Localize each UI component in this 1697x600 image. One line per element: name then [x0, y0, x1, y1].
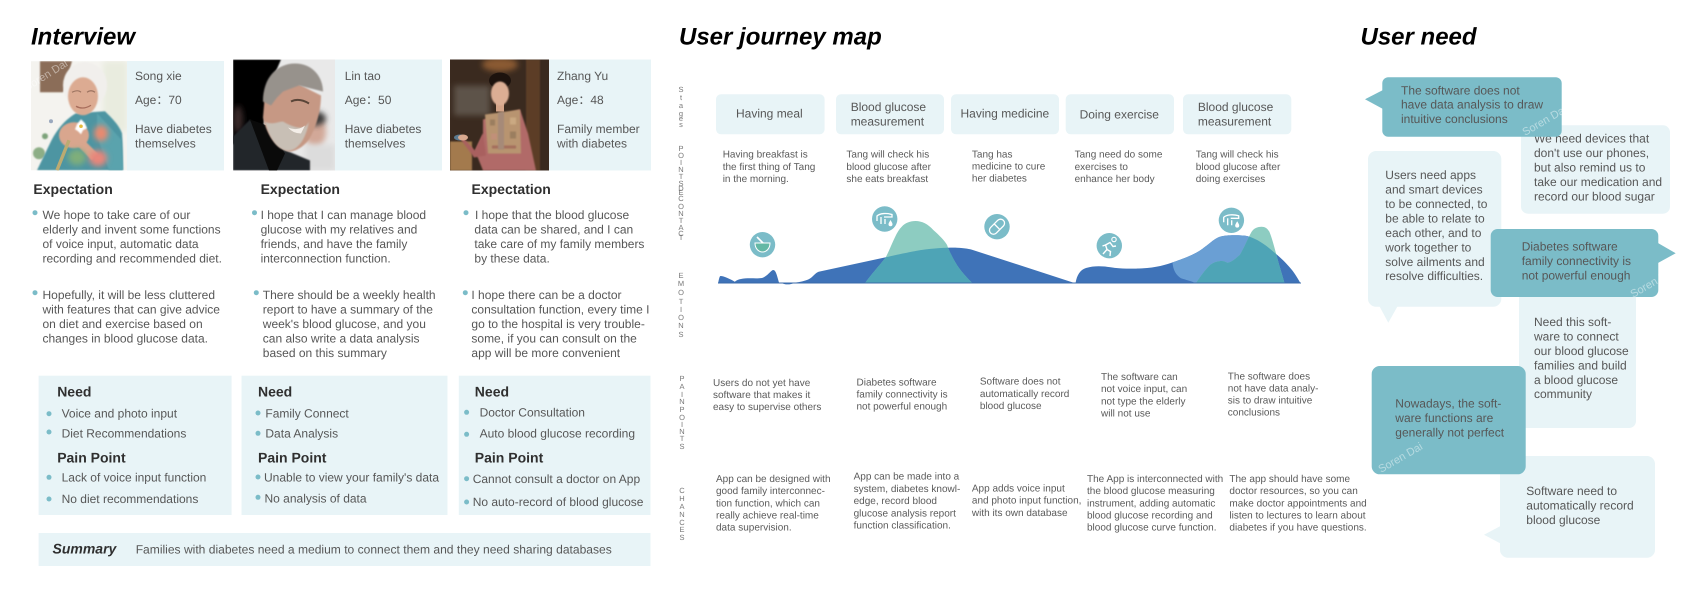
icon: glucose meter again	[1219, 208, 1244, 233]
row label: points of contact: S	[678, 179, 684, 188]
speech bubble: data analysis: intuitive conclusions	[1401, 112, 1508, 126]
speech bubble: devices: record our blood sugar	[1534, 189, 1655, 203]
row label: points of contact: N	[678, 165, 684, 174]
chances text row: App adds voice input	[972, 484, 1065, 495]
expectation column 1: of voice input, automatic data	[42, 237, 199, 251]
speech bubble: automatic recording: blood glucose	[1526, 513, 1601, 527]
speech bubble: apps and smart devices: solve ailments and	[1385, 255, 1485, 269]
pain points text row: Diabetes software	[856, 377, 937, 388]
chances text row: data supervision.	[716, 523, 792, 534]
row label: stages	[678, 85, 684, 129]
row label: stages: S	[678, 85, 684, 94]
speech bubble: functions not perfect: ware functions are	[1394, 411, 1494, 425]
row label: stages: t	[680, 93, 683, 102]
section: interview	[22, 23, 651, 566]
person details	[135, 69, 212, 150]
row label: pain points: P	[679, 374, 685, 383]
expectation column 3: by these data.	[474, 252, 550, 266]
section: user need	[1360, 23, 1677, 558]
chances text row: The app should have some	[1229, 474, 1350, 485]
chances text row: good family interconnec-	[716, 486, 825, 497]
chances text row: App can be made into a	[854, 472, 960, 483]
row label: emotions: O	[678, 313, 684, 322]
person details: Lin tao	[345, 69, 381, 83]
speech bubble: blood glucose community	[1519, 285, 1636, 428]
row label: stages: a	[679, 101, 684, 110]
row label: pain points	[679, 374, 685, 451]
person details: themselves	[345, 136, 405, 150]
photo: elderly woman with a flower	[22, 58, 127, 170]
row label: points of contact: P	[678, 144, 684, 153]
expectation column 1	[32, 181, 222, 346]
expectation column 3: I hope that the blood glucose	[475, 208, 629, 222]
panel: need and pain point 2	[242, 376, 448, 515]
pain points text row: not type the elderly	[1101, 396, 1186, 407]
row label: points of contact: E	[678, 188, 684, 197]
speech bubble: devices	[1521, 125, 1670, 214]
contact point text row: blood glucose after	[846, 162, 932, 173]
heading: User need: User need	[1360, 23, 1478, 50]
expectation column 1: Hopefully, it will be less cluttered	[42, 288, 215, 302]
panel: need and pain point 3: Cannot consult a doctor on App	[473, 472, 640, 486]
chances text row: make doctor appointments and	[1229, 498, 1367, 509]
speech bubble: data analysis	[1365, 77, 1569, 139]
expectation column 2: based on this summary	[263, 346, 387, 360]
icon: pill	[984, 214, 1010, 239]
contact point text row: she eats breakfast	[846, 174, 928, 185]
speech bubble: apps and smart devices: each other, and to	[1385, 226, 1482, 240]
person details: with diabetes	[556, 136, 627, 150]
speech bubble: apps and smart devices: resolve difficulties.	[1385, 269, 1483, 283]
row label: pain points: I	[681, 420, 683, 429]
speech bubble: blood glucose community: ware to connect	[1533, 330, 1619, 344]
speech bubble: devices: don't use our phones,	[1534, 146, 1649, 160]
row label: emotions	[678, 271, 684, 339]
chances text row: instrument, adding automatic	[1087, 498, 1215, 509]
row label: emotions: N	[678, 321, 684, 330]
expectation column 2: interconnection function.	[261, 252, 391, 266]
expectation column 3: app will be more convenient	[471, 346, 621, 360]
speech bubble: apps and smart devices	[1368, 151, 1501, 323]
photo: elderly woman with a flower: Soren Dai	[22, 58, 70, 94]
row label: points of contact: D	[678, 184, 684, 193]
expectation column 3	[463, 181, 649, 360]
chances text row: diabetes if you have questions.	[1229, 523, 1367, 534]
pain points text row: will not use	[1100, 408, 1151, 420]
photo: woman in a pink dress	[450, 60, 549, 170]
panel: need and pain point 1: Pain Point	[57, 449, 126, 465]
panel: need and pain point 1: Voice and photo input	[62, 406, 178, 420]
chances text row: App can be designed with	[716, 474, 831, 485]
contact point text row: her diabetes	[972, 174, 1027, 185]
row label: points of contact	[678, 144, 684, 242]
pain points text row: The software can	[1101, 372, 1178, 383]
person details: Age：50	[345, 93, 392, 107]
chances text row: The App is interconnected with	[1087, 474, 1223, 485]
row label: chances: E	[679, 525, 685, 534]
pain points text row: software that makes it	[713, 390, 810, 401]
row label: chances: C	[679, 486, 685, 495]
chances text row: edge, record blood	[854, 496, 937, 507]
speech bubble: family connectivity	[1491, 229, 1677, 301]
speech bubble: apps and smart devices: Users need apps	[1385, 168, 1476, 182]
row label: points of contact: C	[678, 229, 684, 238]
speech bubble: blood glucose community: families and build	[1534, 358, 1627, 372]
pain points text row: blood glucose	[980, 401, 1042, 412]
pain points text row: The software does	[1228, 371, 1310, 382]
expectation column 3: Expectation	[472, 181, 551, 197]
chances text row: function classification.	[854, 521, 951, 532]
speech bubble: blood glucose community: community	[1534, 387, 1592, 401]
chances text row: doctor resources, so you can	[1229, 486, 1358, 497]
pain points text row: easy to supervise others	[713, 402, 821, 413]
heading: Interview: Interview	[31, 23, 136, 50]
speech bubble: data analysis: The software does not	[1401, 83, 1520, 97]
contact point text row: Tang has	[972, 149, 1012, 160]
panel: need and pain point 1: Lack of voice input function	[62, 471, 206, 485]
expectation column 2: I hope that I can manage blood	[261, 208, 426, 222]
profile card: Lin tao	[233, 60, 442, 170]
row label: points of contact: T	[679, 216, 684, 225]
contact point text row: the first thing of Tang	[723, 162, 815, 173]
chances text row: really achieve real-time	[716, 510, 819, 522]
panel: need and pain point 2: No analysis of data	[264, 491, 367, 505]
speech bubble: apps and smart devices: be able to relate to	[1385, 211, 1485, 225]
contact point text row: blood glucose after	[1196, 162, 1281, 173]
chances text row: listen to lectures to learn about	[1229, 510, 1366, 522]
stage: blood glucose measurement: Blood glucose	[851, 100, 926, 114]
chances text row: glucose analysis report	[854, 508, 956, 519]
row label: chances: S	[679, 533, 685, 542]
expectation column 2: glucose with my relatives and	[261, 222, 417, 236]
panel: summary: Summary	[52, 540, 118, 556]
expectation column 3: go to the hospital is very trouble-	[471, 317, 645, 331]
person details: Have diabetes	[345, 122, 421, 136]
row label: stages: e	[679, 114, 683, 123]
pain points text row: Users do not yet have	[713, 378, 811, 389]
contact point text row: Having breakfast is	[723, 150, 808, 161]
row label: emotions: M	[678, 279, 684, 288]
panel: need and pain point 3	[459, 376, 650, 515]
pain points text row: Software does not	[980, 377, 1061, 388]
chances text row	[716, 472, 1367, 534]
expectation column 1: We hope to take care of our	[42, 208, 190, 222]
row label: stages: s	[679, 120, 683, 129]
speech bubble: functions not perfect	[1372, 366, 1526, 476]
contact point text row: enhance her body	[1075, 174, 1155, 185]
speech bubble: automatic recording: automatically record	[1526, 498, 1634, 512]
row label: pain points: O	[679, 413, 685, 422]
speech bubble: data analysis: Soren Dai	[1520, 104, 1569, 139]
speech bubble: blood glucose community: Need this soft-	[1534, 315, 1611, 329]
panel: need and pain point 3: Auto blood glucose recording	[480, 426, 635, 440]
contact point text row: Tang need do some	[1075, 150, 1163, 161]
expectation column 2: week's blood glucose, and you	[262, 317, 426, 331]
expectation column 2: There should be a weekly health	[263, 288, 436, 302]
speech bubble: automatic recording	[1484, 456, 1655, 558]
stage: having medicine	[951, 94, 1059, 134]
pain points text row: not voice input, can	[1101, 384, 1187, 395]
row label: pain points: T	[680, 434, 685, 443]
row label: emotions: S	[678, 330, 684, 339]
row label: emotions: E	[678, 271, 684, 280]
panel: need and pain point 3: Pain Point	[475, 449, 544, 465]
row label: chances: C	[679, 518, 685, 527]
pain points text row: not powerful enough	[856, 402, 947, 412]
chances text row: blood glucose curve function.	[1087, 523, 1217, 534]
stage: blood glucose measurement again	[1183, 94, 1291, 134]
speech bubble: blood glucose community: our blood glucose	[1534, 344, 1629, 358]
expectation column 2	[252, 181, 436, 360]
row label: points of contact: O	[678, 151, 684, 160]
expectation column 3: consultation function, every time I	[471, 302, 649, 316]
stage: doing exercise: Doing exercise	[1080, 107, 1159, 121]
pain points text row: conclusions	[1228, 408, 1280, 419]
expectation column 2: Expectation	[261, 181, 340, 197]
stage: having meal	[716, 94, 825, 134]
expectation column 2: report to have a summary of the	[263, 302, 433, 316]
profile card: Zhang Yu	[450, 58, 651, 170]
expectation column 1: recording and recommended diet.	[42, 252, 222, 266]
expectation column 3: I hope there can be a doctor	[471, 288, 622, 302]
stage: having meal: Having meal	[736, 107, 803, 121]
row label: emotions: O	[678, 288, 684, 297]
pain points text row: family connectivity is	[856, 389, 948, 400]
expectation column 1: with features that can give advice	[42, 302, 220, 316]
person details: Have diabetes	[135, 122, 212, 136]
expectation column 3: take care of my family members	[474, 237, 644, 251]
row label: chances	[679, 486, 685, 542]
icon: runner	[1097, 233, 1122, 258]
contact point text row: doing exercises	[1196, 174, 1265, 185]
chances text row: system, diabetes knowl-	[854, 484, 960, 495]
chances text row: blood glucose recording and	[1087, 510, 1213, 522]
speech bubble: apps and smart devices: to be connected, to	[1385, 197, 1488, 211]
speech bubble: devices: but also remind us to	[1534, 160, 1646, 174]
speech bubble: devices: We need devices that	[1534, 131, 1650, 145]
panel: need and pain point 2: Unable to view your family's data	[264, 471, 439, 485]
speech bubble: family connectivity: Diabetes software	[1522, 240, 1618, 254]
contact point text row: in the morning.	[723, 174, 789, 185]
expectation column 1: on diet and exercise based on	[42, 317, 203, 331]
pain points text row	[713, 371, 1318, 420]
row label: chances: N	[679, 510, 685, 519]
panel: need and pain point 3: No auto-record of blood glucose	[473, 495, 644, 509]
row label: points of contact: T	[679, 172, 684, 181]
stage: doing exercise	[1066, 94, 1174, 134]
panel: need and pain point 2: Family Connect	[265, 406, 349, 420]
photo: smiling man with grey hair	[233, 60, 335, 170]
chances text row: the blood glucose measuring	[1087, 486, 1215, 497]
speech bubble: devices: take our medication and	[1534, 175, 1662, 189]
pain points text row: not have data analy-	[1228, 383, 1318, 394]
contact point text row: medicine to cure	[972, 161, 1046, 172]
panel: need and pain point 3: Need	[475, 384, 509, 400]
person details	[556, 69, 640, 150]
row label: pain points: N	[679, 397, 685, 406]
row label: pain points: P	[679, 405, 685, 414]
section: user journey map	[678, 23, 1367, 542]
chances text row: with its own database	[971, 508, 1068, 519]
icon: glucose meter	[872, 206, 897, 232]
expectation column 1: Expectation	[33, 181, 113, 197]
expectation column 2: friends, and have the family	[261, 237, 407, 251]
panel: need and pain point 2: Data Analysis	[265, 426, 338, 440]
expectation column 3: data can be shared, and I can	[474, 222, 633, 236]
person details: themselves	[135, 136, 196, 150]
chances text row: tion function, which can	[716, 498, 820, 509]
speech bubble: functions not perfect: Nowadays, the soft-	[1395, 397, 1501, 411]
panel: need and pain point 2: Pain Point	[258, 449, 327, 465]
pain points text row: sis to draw intuitive	[1228, 396, 1313, 406]
expectation column 3: some, if you can consult on the	[471, 332, 637, 346]
speech bubble: functions not perfect: Soren Dai	[1376, 441, 1425, 476]
row label: points of contact: N	[678, 209, 684, 218]
panel: need and pain point 2: Need	[258, 384, 292, 400]
panel: need and pain point 3: Doctor Consultation	[480, 405, 585, 419]
row label: pain points: I	[681, 390, 683, 399]
panel: need and pain point 1: No diet recommendations	[62, 492, 198, 506]
row label: pain points: N	[679, 427, 685, 436]
expectation column 2: can also write a data analysis	[263, 332, 420, 346]
speech bubble: apps and smart devices: and smart devices	[1385, 182, 1483, 196]
icon: bowl	[750, 232, 775, 257]
contact point text row: exercises to	[1075, 162, 1128, 173]
stage: blood glucose measurement again: measurement	[1198, 114, 1272, 128]
speech bubble: data analysis: have data analysis to draw	[1401, 98, 1543, 112]
stage: blood glucose measurement: measurement	[851, 114, 925, 128]
row label: points of contact: A	[678, 223, 684, 232]
person details: Zhang Yu	[557, 69, 608, 83]
row label: pain points: S	[679, 442, 685, 451]
row label: points of contact: O	[678, 202, 684, 211]
person details	[345, 69, 421, 150]
person details: Family member	[557, 122, 640, 136]
row label: chances: H	[679, 494, 685, 503]
speech bubble: apps and smart devices: work together to	[1384, 240, 1472, 254]
expectation column 1: changes in blood glucose data.	[42, 332, 208, 346]
speech bubble: family connectivity: Soren Dai	[1628, 266, 1677, 301]
panel: summary: Families with diabetes need a medium to connect them and they need sharing databases	[136, 543, 612, 557]
expectation column 1: elderly and invent some functions	[42, 222, 221, 236]
contact point text row: Tang will check his	[1196, 150, 1279, 161]
speech bubble: blood glucose community: a blood glucose	[1534, 373, 1618, 387]
panel: need and pain point 1: Need	[57, 384, 91, 400]
row label: pain points: A	[679, 382, 685, 391]
stage: having medicine: Having medicine	[960, 107, 1050, 121]
pain points text row: automatically record	[980, 389, 1069, 400]
row label: points of contact: T	[679, 233, 684, 242]
row label: emotions: T	[679, 297, 684, 306]
person details: Song xie	[135, 69, 182, 83]
row label: stages: g	[679, 109, 683, 118]
stage: blood glucose measurement	[836, 94, 944, 134]
speech bubble: automatic recording: Software need to	[1526, 484, 1617, 498]
speech bubble: family connectivity: not powerful enough	[1522, 268, 1630, 282]
person details: Age：48	[557, 93, 604, 107]
row label: points of contact: I	[680, 158, 682, 167]
contact point text row: Tang will check his	[846, 150, 929, 161]
row label: chances: A	[679, 502, 685, 511]
speech bubble: family connectivity: family connectivity is	[1522, 254, 1631, 268]
panel: need and pain point 1: Diet Recommendations	[62, 426, 186, 440]
chances text row: and photo input function,	[972, 496, 1081, 507]
emotion area chart	[718, 221, 1301, 284]
profile card: Song xie	[22, 58, 224, 170]
contact point text row	[723, 149, 1281, 185]
heading: User journey map: User journey map	[679, 23, 882, 50]
speech bubble: functions not perfect: generally not perfect	[1395, 426, 1505, 440]
row label: points of contact: C	[678, 194, 684, 203]
person details: Age：70	[135, 93, 182, 107]
panel: summary	[39, 533, 651, 566]
row label: emotions: I	[680, 305, 682, 314]
stage: blood glucose measurement again: Blood glucose	[1198, 100, 1274, 114]
panel: need and pain point 1	[39, 376, 232, 515]
